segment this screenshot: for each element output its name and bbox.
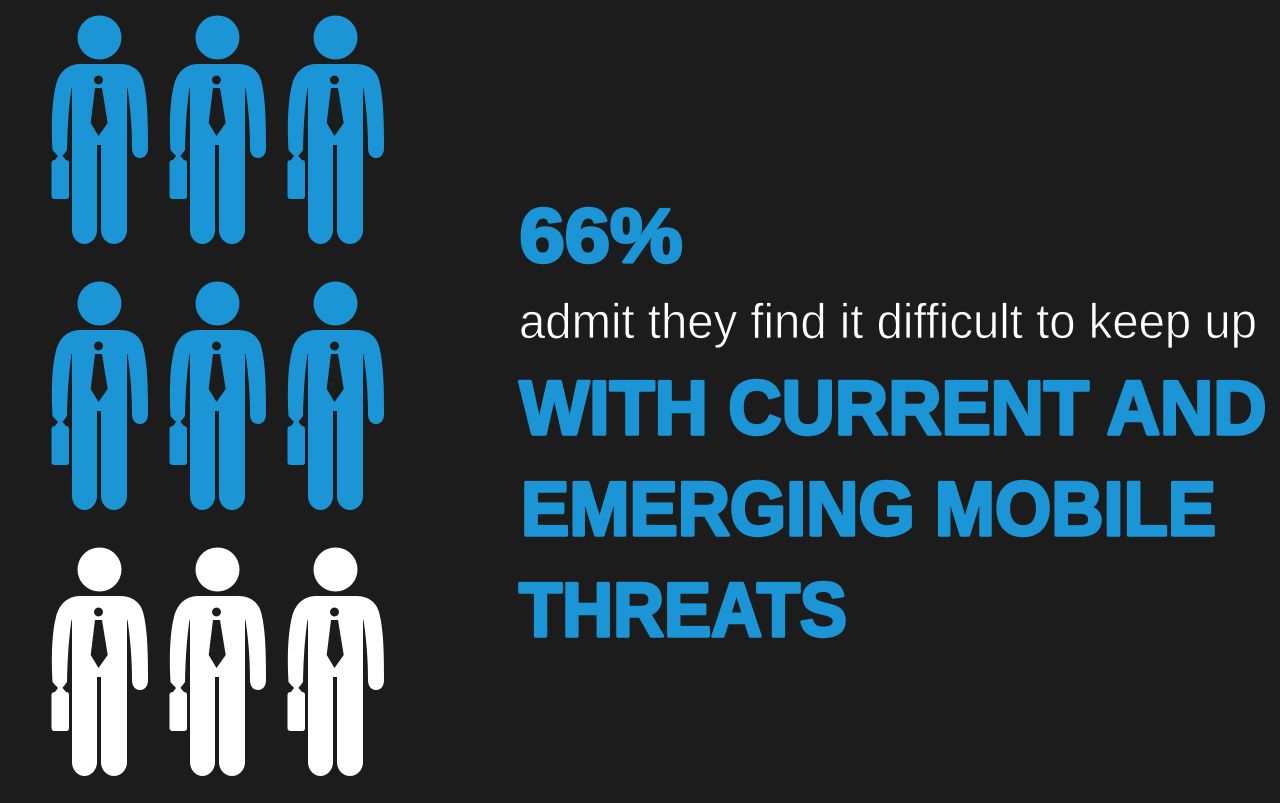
text: description line: admit they find it difficult to keep up	[519, 295, 1257, 349]
heading line 1: WITH CURRENT AND	[520, 366, 1266, 451]
icon: blue person row 1 column 3	[288, 16, 384, 244]
icon: white person row 3 column 3	[288, 548, 384, 776]
heading: emphasised statement	[519, 366, 1266, 653]
heading line 3: THREATS	[519, 568, 847, 653]
pictogram: grid of nine business people	[52, 16, 384, 776]
icon: blue person row 1 column 1	[52, 16, 148, 244]
icon: blue person row 2 column 1	[52, 282, 148, 510]
icon: blue person row 2 column 3	[288, 282, 384, 510]
icon: blue person row 2 column 2	[170, 282, 266, 510]
statistic: 66%: 66%	[520, 194, 682, 279]
icon: blue person row 1 column 2	[170, 16, 266, 244]
icon: white person row 3 column 2	[170, 548, 266, 776]
heading line 2: EMERGING MOBILE	[521, 467, 1216, 552]
icon: white person row 3 column 1	[52, 548, 148, 776]
